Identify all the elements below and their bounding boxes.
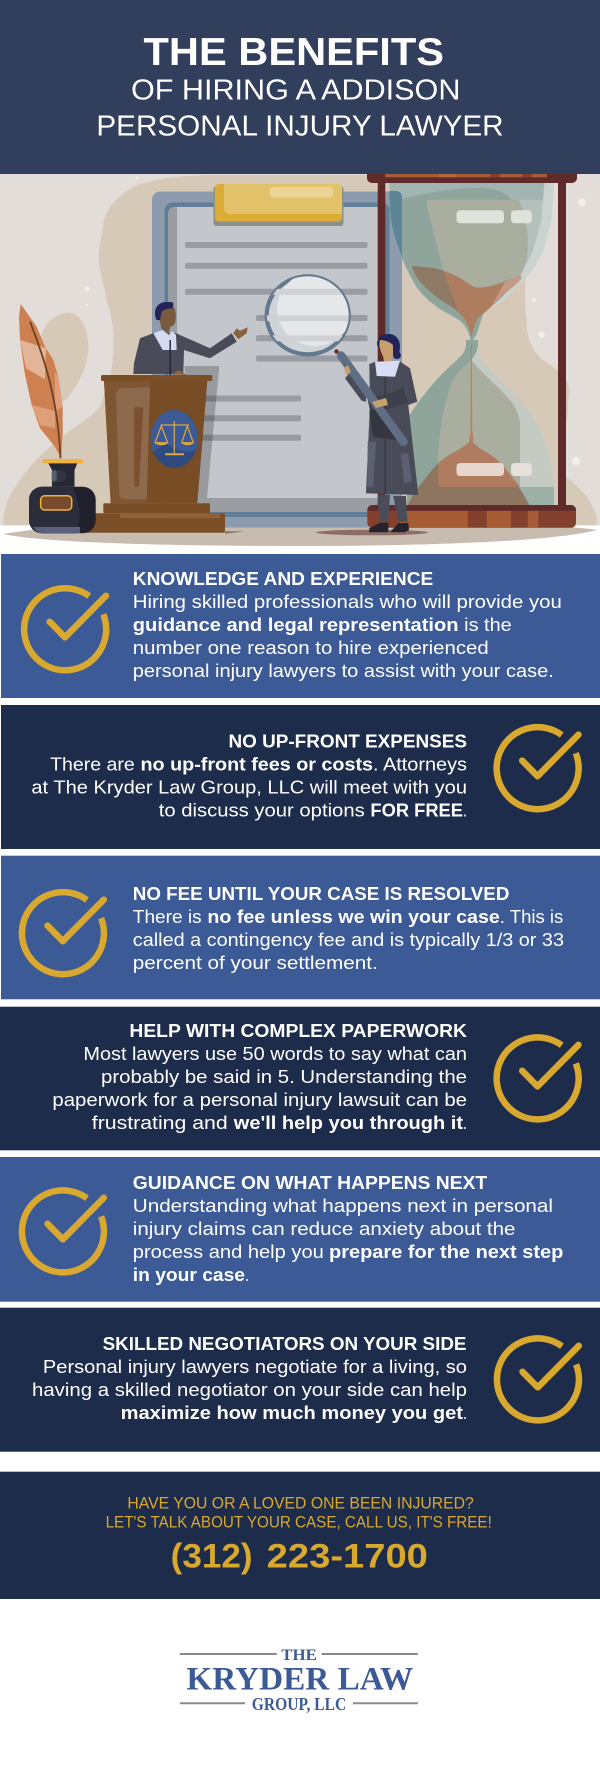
body text: . [463, 1403, 467, 1423]
heading: GUIDANCE ON WHAT HAPPENS NEXT [133, 1173, 487, 1193]
body text [133, 907, 564, 973]
body text: no fee unless we win your case [207, 907, 500, 927]
body text: . Attorneys [373, 754, 467, 774]
body text: is the [464, 615, 512, 635]
logo: The Kryder Law Group: KRYDER LAW [186, 1661, 413, 1697]
body text: FOR FREE [370, 800, 463, 820]
body text: paperwork for a personal injury lawsuit can be [52, 1090, 467, 1110]
body text: having a skilled negotiator on your side can help [32, 1380, 467, 1400]
title [96, 31, 504, 143]
feather quill [19, 304, 63, 458]
icon: check mark [497, 1338, 579, 1420]
body text: we'll help you through it [233, 1113, 463, 1133]
phone number: 223-1700 [267, 1537, 428, 1575]
lower sand [408, 440, 529, 505]
heading: KNOWLEDGE AND EXPERIENCE [133, 569, 433, 589]
title: OF HIRING A ADDISON [131, 75, 460, 107]
body text: injury claims can reduce anxiety about the [133, 1219, 516, 1239]
body text: in your case [133, 1265, 245, 1285]
phone number: (312) [171, 1537, 253, 1575]
lower glass bulb [407, 340, 555, 505]
body text: There are [50, 754, 135, 774]
body text: personal injury lawyers to assist with your case. [133, 661, 554, 681]
icon: check mark [22, 1190, 104, 1272]
title: THE BENEFITS [144, 31, 444, 74]
dots [84, 177, 586, 465]
panel: what happens next [0, 1157, 600, 1302]
call to action text [106, 1494, 492, 1532]
podium [85, 375, 245, 534]
icon: check mark [497, 727, 579, 809]
logo: The Kryder Law Group: GROUP, LLC [252, 1694, 346, 1714]
inkwell [29, 459, 96, 533]
illustration: lawyers, clipboard and hourglass [0, 174, 600, 546]
icon: check mark [497, 1037, 579, 1119]
icon: check mark [24, 588, 106, 670]
body text: Most lawyers use 50 words to say what can [83, 1044, 467, 1064]
panel: skilled negotiators [0, 1308, 600, 1452]
man lawyer at podium [133, 302, 248, 375]
body text [32, 1357, 467, 1423]
body text: Understanding what happens next in personal [133, 1196, 553, 1216]
body text: frustrating and [92, 1113, 228, 1133]
body text [31, 754, 467, 820]
icon: check mark [22, 892, 104, 974]
clipboard [152, 184, 402, 528]
body text: percent of your settlement. [133, 953, 378, 973]
clipboard clip [214, 184, 344, 226]
logo: The Kryder Law Group [180, 1647, 418, 1714]
magnifying glass [262, 272, 353, 354]
body text [133, 592, 562, 681]
body text: . This is [500, 907, 563, 927]
heading: SKILLED NEGOTIATORS ON YOUR SIDE [103, 1334, 466, 1354]
panel: complex paperwork [0, 1007, 600, 1150]
hourglass [367, 174, 577, 528]
cream panel inside glass [427, 200, 528, 311]
panel: no up-front expenses [1, 705, 600, 849]
heading: NO FEE UNTIL YOUR CASE IS RESOLVED [133, 884, 509, 904]
body text: . [245, 1265, 249, 1285]
logo: The Kryder Law Group: THE [281, 1647, 317, 1664]
upper glass bulb [389, 183, 554, 374]
hourglass posts [378, 183, 385, 505]
body text: no up-front fees or costs [140, 754, 373, 774]
body text: process and help you [133, 1242, 324, 1262]
call to action text: HAVE YOU OR A LOVED ONE BEEN INJURED? [127, 1494, 474, 1513]
body text [52, 1044, 467, 1133]
woman lawyer [316, 334, 428, 535]
background blob [3, 175, 597, 525]
ground [3, 523, 597, 546]
sand thread [469, 343, 474, 441]
body text: maximize how much money you get [121, 1403, 463, 1423]
body text [133, 1196, 563, 1285]
document text lines [185, 242, 368, 441]
header banner [0, 0, 600, 174]
call to action panel [0, 1472, 600, 1599]
body text: guidance and legal representation [133, 615, 459, 635]
body text: Personal injury lawyers negotiate for a living, so [43, 1357, 467, 1377]
glass highlights [456, 210, 532, 476]
body text: . [463, 1113, 467, 1133]
call to action text: LET'S TALK ABOUT YOUR CASE, CALL US, IT'S FREE! [106, 1513, 492, 1532]
teal tint inside glass [390, 188, 528, 344]
emblem: scales of justice [151, 410, 198, 468]
heading: HELP WITH COMPLEX PAPERWORK [129, 1021, 467, 1041]
phone number [171, 1537, 428, 1575]
body text: prepare for the next step [329, 1242, 563, 1262]
body text: called a contingency fee and is typically 1/3 or 33 [133, 930, 564, 950]
base plate [367, 505, 576, 528]
body text: at The Kryder Law Group, LLC will meet with you [31, 777, 467, 797]
panel: no fee until resolved [1, 856, 600, 999]
body text: . [463, 800, 467, 820]
body text: Hiring skilled professionals who will provide you [133, 592, 562, 612]
panel: knowledge and experience [1, 554, 600, 698]
top plate [367, 174, 577, 183]
body text: number one reason to hire experienced [133, 638, 489, 658]
podium shadow on paper [184, 366, 219, 498]
body text: probably be said in 5. Understanding the [101, 1067, 467, 1087]
body text: There is [133, 907, 202, 927]
leaf blob behind feather [40, 313, 88, 402]
body text: to discuss your options [159, 800, 365, 820]
heading: NO UP-FRONT EXPENSES [228, 731, 467, 751]
upper sand [412, 266, 522, 337]
title: PERSONAL INJURY LAWYER [96, 111, 504, 143]
